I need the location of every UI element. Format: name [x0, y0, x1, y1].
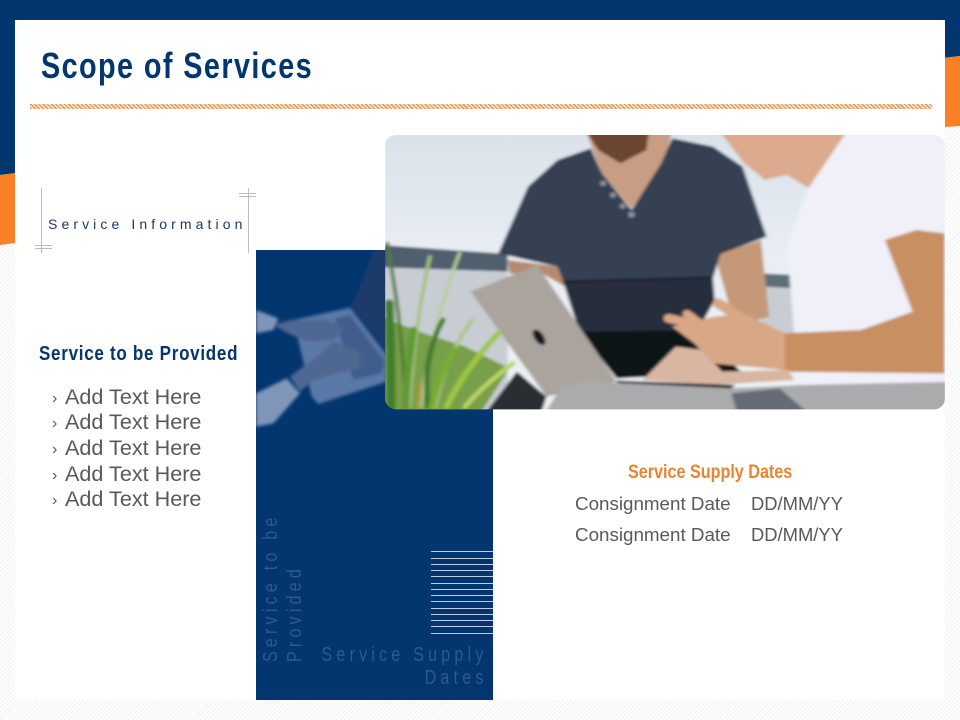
consignment row 1: Consignment Date — [575, 493, 731, 514]
list item 3: › — [52, 441, 57, 458]
heading: service to be provided: Service to be Provided — [39, 343, 238, 365]
stripes — [431, 551, 493, 634]
horizontal label: service supply dates: Dates — [425, 667, 488, 689]
photo: two men with laptop — [385, 135, 945, 410]
list item 2: Add Text Here — [65, 409, 201, 434]
consignment row 1: DD/MM/YY — [751, 493, 843, 514]
consignment row 2: Consignment Date — [575, 524, 731, 545]
list item 5: Add Text Here — [65, 486, 201, 511]
list item 3: Add Text Here — [65, 435, 201, 460]
heading: service supply dates: Service Supply Dates — [628, 462, 792, 483]
crop marks — [35, 188, 256, 253]
consignment row 2 — [575, 524, 843, 545]
title: Scope of Services — [41, 45, 313, 86]
list item 1: Add Text Here — [65, 384, 201, 409]
section label: Service Information — [48, 216, 247, 232]
consignment row 2: DD/MM/YY — [751, 524, 843, 545]
list item 1: › — [52, 390, 57, 407]
title rope divider — [30, 104, 932, 109]
list item 4: › — [52, 467, 57, 484]
laptop hands image — [256, 250, 386, 428]
horizontal label: service supply dates: Service Supply — [322, 644, 488, 666]
vertical label: provided: Provided — [284, 565, 306, 662]
list item 5: › — [52, 492, 57, 509]
vertical label: service to be: Service to be — [260, 513, 282, 662]
consignment row 1 — [575, 493, 843, 514]
horizontal label: service supply dates — [322, 644, 488, 689]
panel: service information label — [35, 188, 256, 253]
list item 4: Add Text Here — [65, 461, 201, 486]
list item 2: › — [52, 415, 57, 432]
panel: navy block — [256, 250, 493, 700]
list: service items — [52, 384, 201, 511]
